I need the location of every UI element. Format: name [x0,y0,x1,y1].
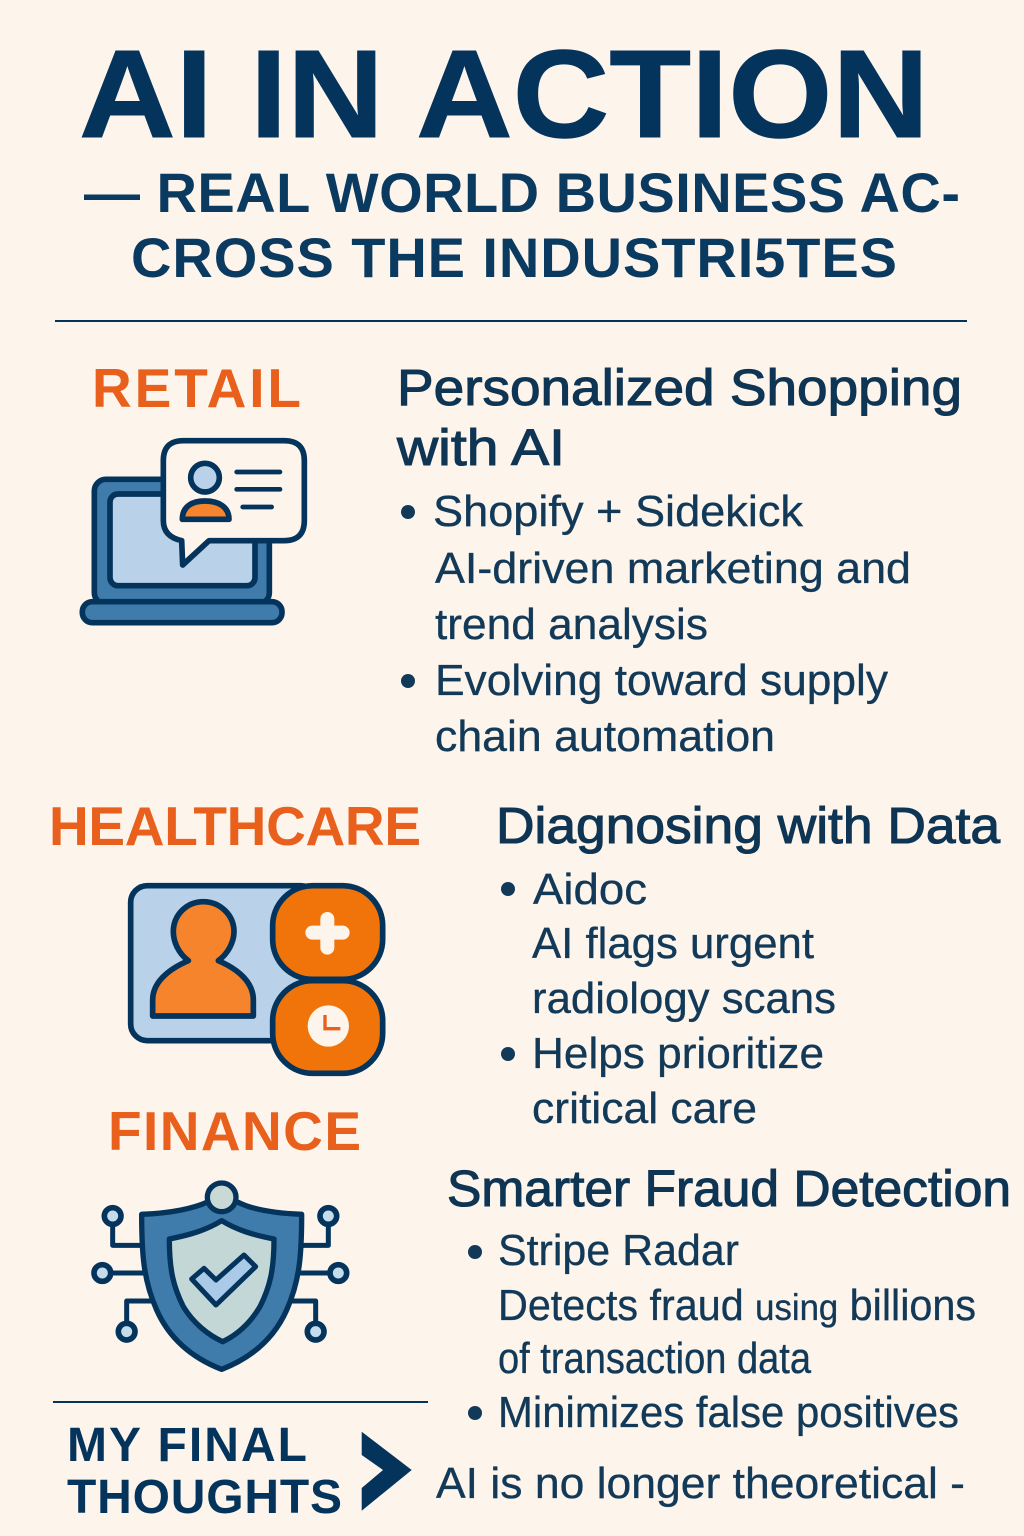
panel: healthcare text [496,797,1001,1133]
bullets: finance: Stripe Radar [498,1226,739,1275]
heading: personalized shopping: Personalized Shopping [397,359,962,416]
heading: my final thoughts: THOUGHTS [67,1471,342,1524]
heading: finance: FINANCE [108,1100,361,1162]
heading: my final thoughts: MY FINAL [67,1419,307,1472]
heading: my final thoughts [67,1419,342,1524]
bullets: healthcare: Aidoc [533,865,647,914]
bullets: finance [468,1226,976,1437]
bullets: finance: Minimizes false positives [498,1388,959,1437]
arrow [362,1432,412,1511]
bullets: healthcare: critical care [532,1084,757,1133]
subtitle [84,161,960,289]
final statement: AI is no longer theoretical - [436,1459,965,1508]
title: AI IN ACTION [79,25,929,164]
heading: healthcare: HEALTHCARE [49,795,421,857]
bullets: healthcare [501,865,836,1133]
subtitle: CROSS THE INDUSTRI5TES [131,226,897,289]
icon: shield with circuits [94,1183,347,1369]
heading: personalized shopping: with AI [396,419,565,476]
bullets: healthcare: AI flags urgent [532,919,814,968]
subtitle: — REAL WORLD BUSINESS AC- [84,161,960,224]
bullets: retail: Shopify + Sidekick [433,487,804,536]
bullets: finance: Detects fraud using billions [498,1281,976,1330]
bullets: finance: of transaction data [498,1334,811,1383]
panel: finance text [447,1160,1011,1437]
heading: personalized shopping [396,359,962,476]
icon: laptop with chat bubble [82,441,304,623]
heading: smarter fraud detection: Smarter Fraud Detection [447,1160,1011,1217]
bullets: retail [401,487,911,761]
bullets: healthcare: radiology scans [532,974,836,1023]
heading: diagnosing with data: Diagnosing with Data [496,797,1001,854]
icon: patient card [131,886,383,1073]
bullets: retail: trend analysis [435,600,708,649]
bullets: retail: Evolving toward supply [435,656,888,705]
bullets: retail: AI-driven marketing and [435,544,911,593]
panel: retail text [396,359,962,761]
bullets: healthcare: Helps prioritize [532,1029,824,1078]
heading: retail: RETAIL [92,357,301,419]
bullets: retail: chain automation [435,712,775,761]
